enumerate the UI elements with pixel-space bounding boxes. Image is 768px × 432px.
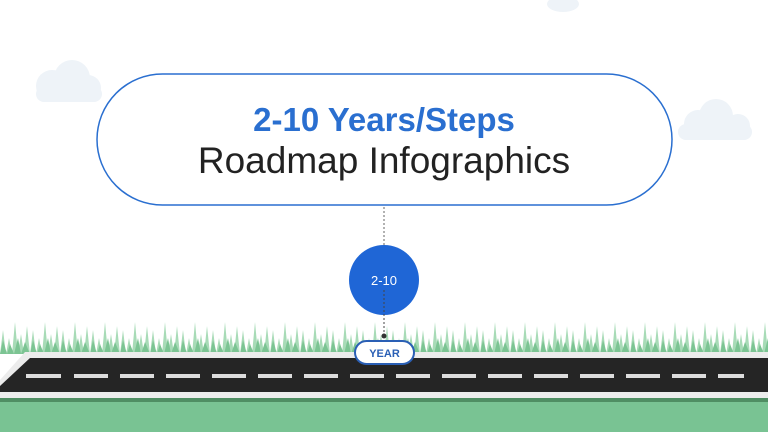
subheading: Roadmap Infographics [198, 140, 570, 181]
grass [0, 318, 768, 354]
title pill [97, 74, 672, 205]
cloud: top [547, 0, 579, 12]
year label [355, 341, 414, 364]
year label: YEAR [369, 348, 400, 360]
cloud: right [678, 99, 752, 140]
road [0, 352, 768, 432]
heading: 2-10 Years/Steps [253, 101, 515, 138]
step circle: 2-10 [371, 273, 397, 288]
connector dotted line [383, 207, 385, 245]
cloud: top left [36, 60, 102, 102]
pin line [382, 290, 386, 338]
step circle [349, 245, 419, 315]
lane dashes [26, 374, 744, 378]
